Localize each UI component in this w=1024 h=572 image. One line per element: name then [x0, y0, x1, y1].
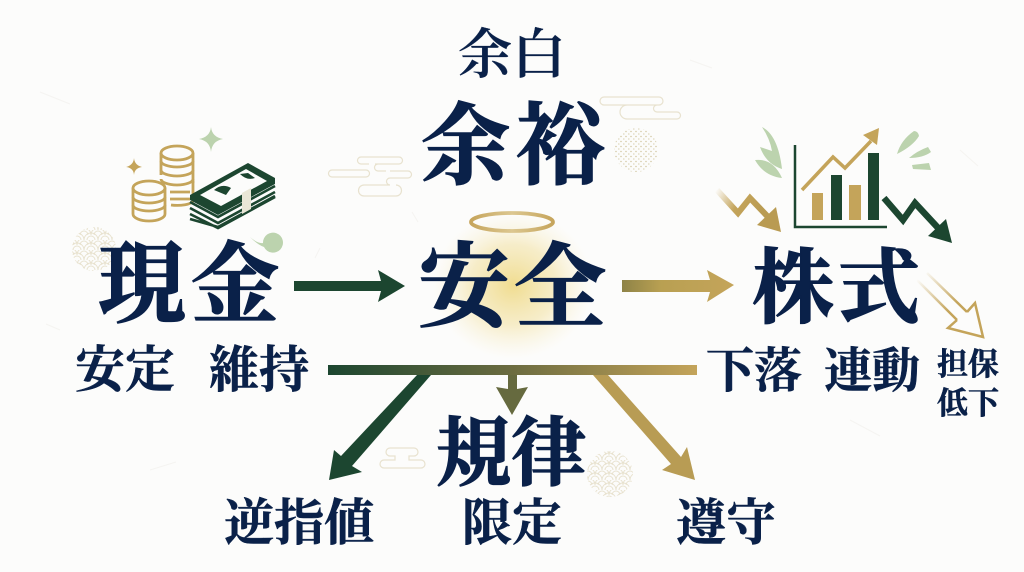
- label: 担保低下: [937, 347, 1000, 421]
- label: 維持: 維持: [209, 342, 309, 398]
- icon: sparkles: [199, 127, 223, 152]
- arrow: branch to 限定: [496, 375, 528, 415]
- icon: rising chart: [755, 127, 931, 227]
- decoration: clouds right of 余裕: [600, 97, 680, 119]
- label: 安定: 安定: [75, 342, 175, 398]
- chart bars: [812, 153, 879, 220]
- label: 遵守: 遵守: [676, 495, 776, 551]
- heading: 余裕: 余裕: [421, 99, 611, 197]
- icon: burst right: [897, 131, 931, 170]
- chart trend arrow: [802, 141, 871, 190]
- arrow: outline falling: [917, 273, 983, 337]
- halo ring: [471, 213, 553, 231]
- label: 下落: 下落: [706, 345, 802, 398]
- background paper fibres: [40, 60, 978, 470]
- decoration: clouds left of 余裕: [328, 157, 412, 196]
- label: 連動: 連動: [824, 345, 920, 398]
- arrow: gold zigzag down: [717, 190, 781, 232]
- arrow: branch to 逆指値: [329, 375, 431, 480]
- term: 安全: 安全: [418, 237, 610, 339]
- label: 逆指値: 逆指値: [224, 495, 374, 551]
- icon: coin stacks: [133, 146, 193, 221]
- icon: leaves left: [755, 127, 782, 178]
- decoration: clouds near 規律: [380, 448, 425, 468]
- label: 担保低下: 担保: [937, 347, 999, 382]
- horizontal branch bar and arrows: [328, 365, 697, 480]
- decoration: wave circle near 現金: [72, 227, 116, 271]
- decoration: wave circle near 規律: [587, 451, 633, 497]
- term: 現金: 現金: [98, 238, 284, 335]
- icon: green drop: [250, 233, 283, 253]
- arrow: branch to 遵守: [593, 375, 695, 480]
- chart axes: [795, 145, 887, 227]
- arrow: 現金 to 安全: [294, 270, 405, 302]
- heading: 余白: 余白: [458, 25, 566, 85]
- decoration: dotted wave circle: [614, 128, 658, 172]
- icon: coins and banknotes: [126, 127, 283, 253]
- icon: banknote stack: [190, 163, 275, 228]
- label: 限定: 限定: [462, 495, 562, 551]
- glow behind 安全: [433, 211, 593, 359]
- label: 担保低下: 低下: [937, 386, 1000, 421]
- term: 規律: 規律: [436, 413, 586, 496]
- arrow: 安全 to 株式: [622, 270, 734, 302]
- arrow: green zigzag down: [884, 198, 952, 243]
- term: 株式: 株式: [752, 243, 924, 334]
